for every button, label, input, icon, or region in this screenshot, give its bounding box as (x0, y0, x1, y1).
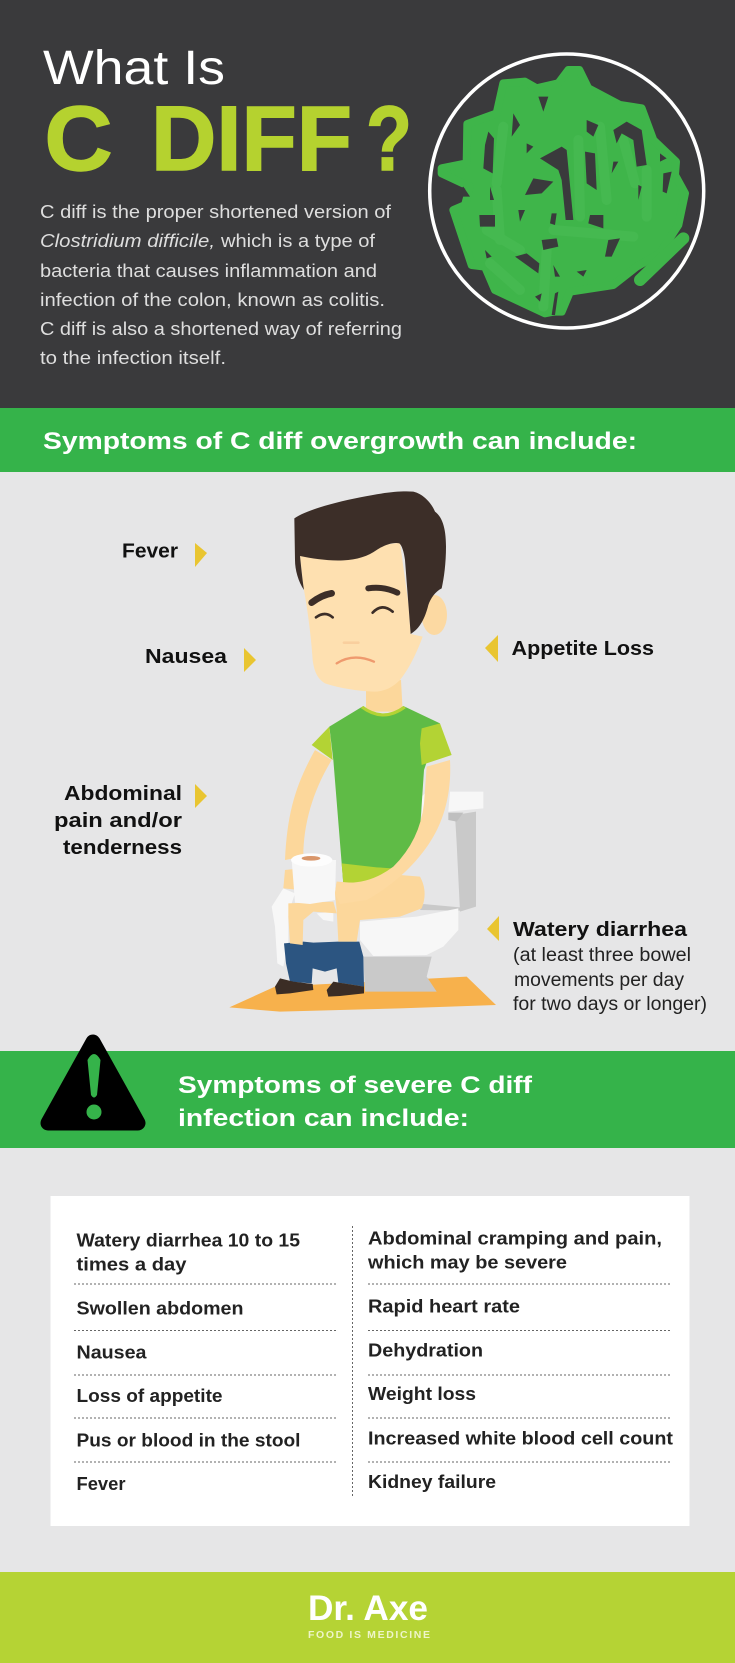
column: left list (76, 1230, 300, 1494)
text block: definition: bacteria that causes inflammation and (40, 261, 377, 281)
text block: definition: C diff is the proper shortened version of (40, 202, 392, 222)
column: left list: Watery diarrhea 10 to 15 (76, 1230, 300, 1250)
column: right list: Kidney failure (368, 1472, 496, 1492)
footer: Dr. Axe logo: Dr. Axe (308, 1589, 428, 1628)
panel: severe symptoms background (0, 1148, 735, 1572)
text block: definition: which is a type of (220, 231, 376, 251)
left arm (285, 750, 332, 860)
label: Watery diarrhea: for two days or longer) (513, 994, 707, 1015)
banner: severe symptoms heading: Symptoms of severe C diff (178, 1072, 533, 1099)
arrow: Appetite Loss (485, 635, 498, 662)
label: Abdominal pain: pain and/or (54, 810, 182, 832)
label: Watery diarrhea (513, 919, 707, 1015)
label: Abdominal pain (54, 783, 182, 859)
footer: Dr. Axe logo (0, 1572, 735, 1663)
label: Appetite Loss: Appetite Loss (512, 638, 654, 660)
label: Watery diarrhea: Watery diarrhea (513, 919, 688, 941)
text block: definition: infection of the colon, known as colitis. (40, 290, 385, 310)
column: left list: Swollen abdomen (76, 1298, 244, 1318)
banner: severe symptoms heading: infection can include: (178, 1105, 469, 1132)
text block: definition: C diff is also a shortened way of referring (40, 319, 402, 339)
title: C DIFF?: DIFF (151, 88, 352, 190)
column: right list: which may be severe (367, 1252, 567, 1272)
column: right list: Abdominal cramping and pain, (368, 1228, 662, 1248)
label: Abdominal pain: Abdominal (64, 783, 182, 805)
label: Abdominal pain: tenderness (63, 837, 182, 859)
icon: bacteria in circle (430, 54, 704, 328)
text block: definition: Clostridium difficile, (40, 231, 215, 251)
panel: symptoms background (0, 472, 735, 1051)
column: left list: Fever (76, 1474, 126, 1494)
panel: dark header (0, 0, 735, 408)
text block: definition (40, 202, 402, 368)
banner: symptoms heading (0, 408, 735, 472)
illustration: man on toilet (229, 491, 496, 1012)
shirt and face (294, 491, 452, 884)
arrow: Fever (195, 543, 207, 567)
column: left list: Pus or blood in the stool (76, 1430, 300, 1450)
icon: warning triangle (48, 1042, 138, 1123)
column: left list: Loss of appetite (76, 1386, 222, 1406)
arrow: Nausea (244, 648, 256, 672)
label: Nausea: Nausea (145, 646, 228, 668)
label: Watery diarrhea: movements per day (514, 970, 685, 991)
text block: definition: to the infection itself. (40, 348, 226, 368)
arrow: Watery diarrhea (487, 916, 499, 941)
banner: symptoms heading: Symptoms of C diff overgrowth can include: (43, 428, 637, 455)
title: C DIFF?: ? (366, 88, 412, 190)
label: Fever: Fever (122, 540, 178, 562)
toilet and mat (229, 792, 496, 1012)
arrow: Abdominal pain (195, 784, 207, 808)
footer: Dr. Axe logo: FOOD IS MEDICINE (308, 1629, 430, 1641)
column: right list: Rapid heart rate (368, 1296, 520, 1316)
title: C DIFF?: C (44, 88, 112, 190)
column: left list: times a day (76, 1254, 186, 1274)
column: right list: Increased white blood cell count (368, 1428, 673, 1448)
column: left list: Nausea (76, 1342, 148, 1362)
pants, roll and legs (272, 760, 450, 997)
column: right list: Weight loss (368, 1384, 476, 1404)
column: right list (367, 1228, 673, 1492)
column: right list: Dehydration (368, 1340, 483, 1360)
title: C DIFF? (44, 88, 412, 190)
banner: severe symptoms heading (0, 1051, 735, 1148)
panel: severe symptoms list (50, 1196, 690, 1526)
label: Watery diarrhea: (at least three bowel (513, 945, 691, 966)
title: What Is: What Is (43, 42, 225, 95)
